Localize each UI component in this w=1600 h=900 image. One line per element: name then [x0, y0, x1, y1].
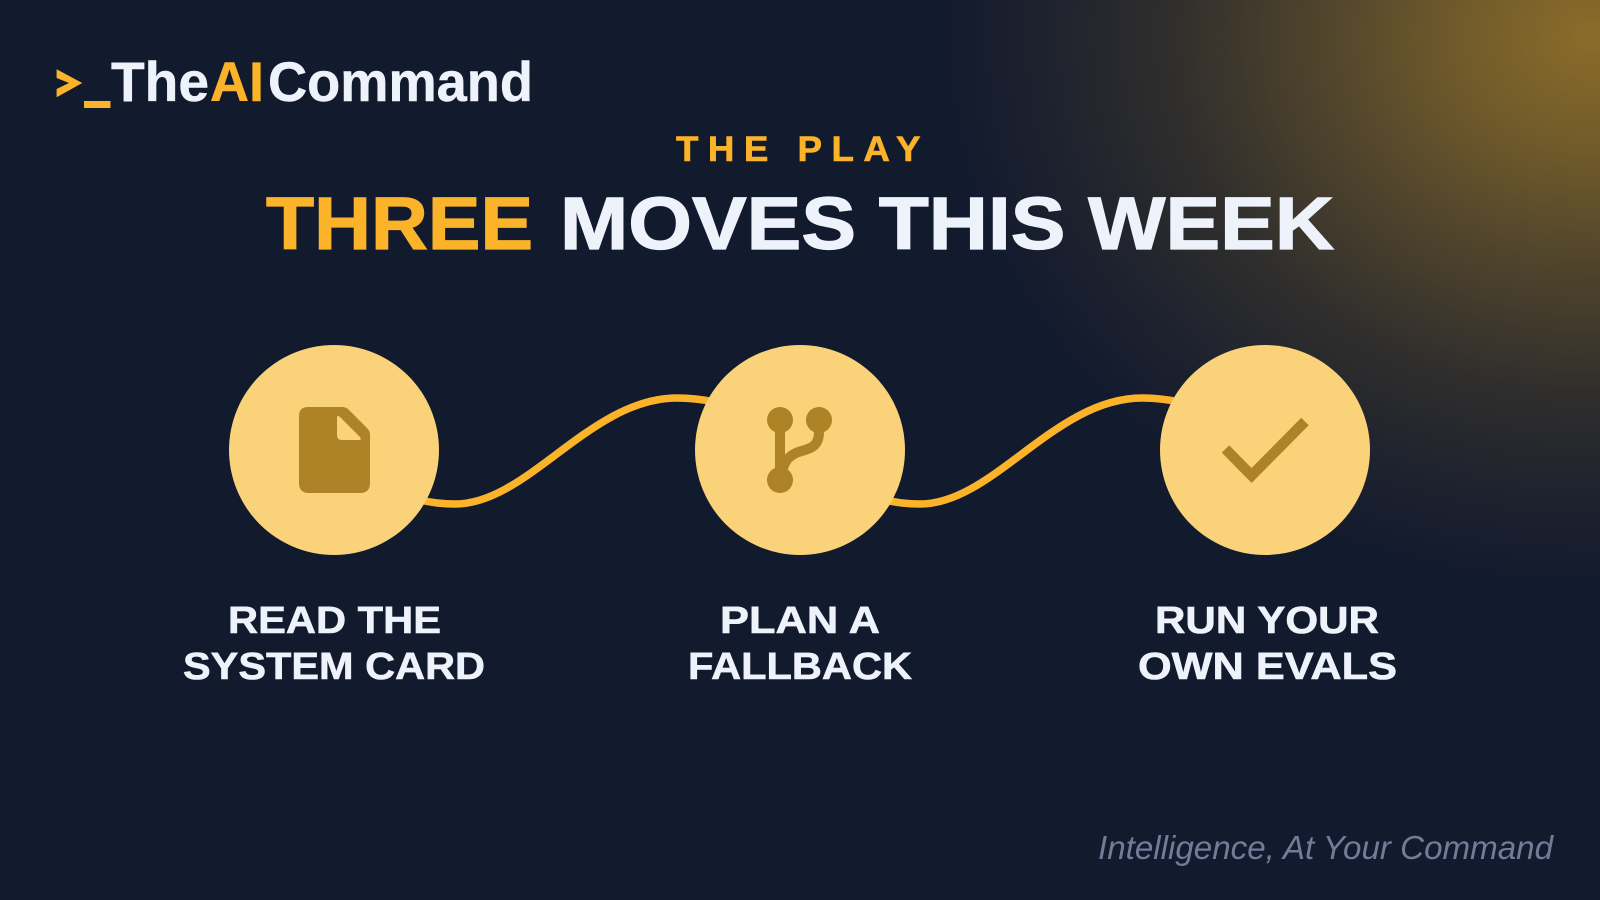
logo wordmark: The [111, 50, 209, 113]
connector 2 to 3 [880, 398, 1180, 504]
step 2 circle [695, 345, 905, 555]
tagline: Intelligence, At Your Command [1098, 829, 1555, 866]
step 1 label: SYSTEM CARD [183, 646, 485, 688]
corner glow [900, 0, 1600, 650]
step 2 label: PLAN A [720, 600, 880, 642]
step 3 label: OWN EVALS [1138, 646, 1397, 688]
step 1 label: READ THE [228, 600, 441, 642]
step 1 circle [229, 345, 439, 555]
icon: document [299, 407, 370, 493]
logo [57, 50, 533, 113]
eyebrow: the play: THE PLAY [676, 130, 930, 169]
title: THREE [266, 182, 533, 265]
connector 1 to 2 [415, 398, 715, 504]
logo wordmark: AI [210, 50, 264, 113]
icon: check [1226, 422, 1305, 476]
step 1 [183, 345, 485, 688]
logo prompt icon [57, 69, 110, 108]
step 3 circle [1160, 345, 1370, 555]
icon: branch [767, 407, 832, 493]
step 3 label: RUN YOUR [1155, 600, 1379, 642]
logo wordmark: Command [268, 50, 533, 113]
step 3 [1138, 345, 1397, 688]
title: MOVES THIS WEEK [560, 182, 1334, 265]
step 2 [688, 345, 913, 688]
step 2 label: FALLBACK [688, 646, 913, 688]
